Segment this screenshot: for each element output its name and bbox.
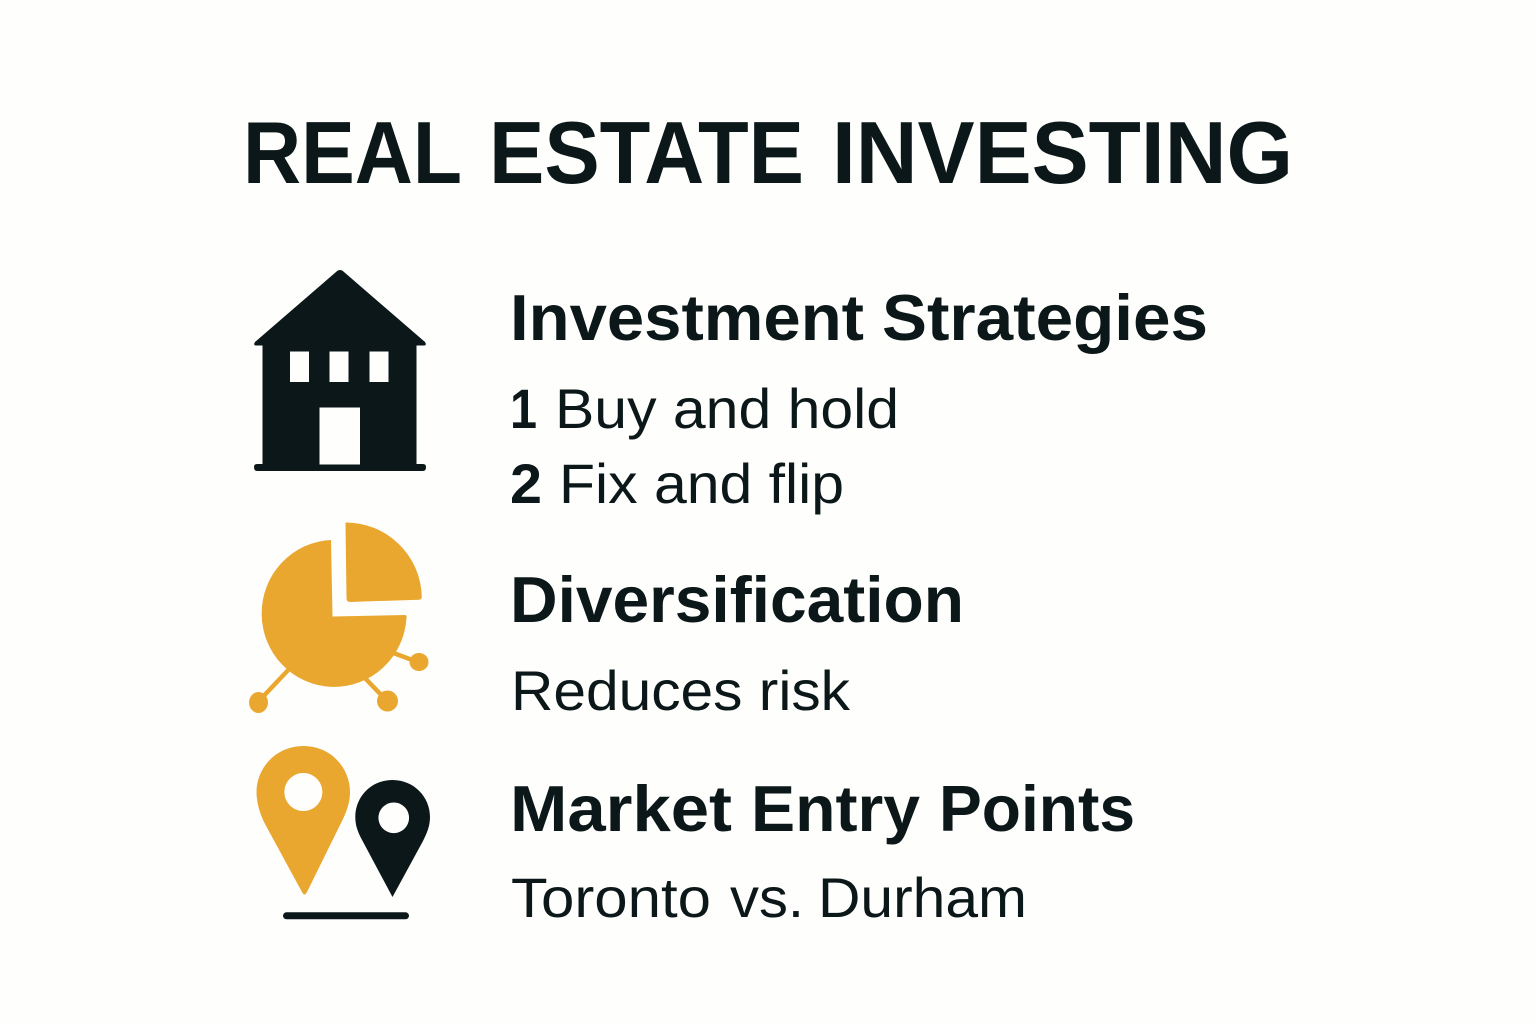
list item: fix and flip: 2: [510, 452, 542, 515]
heading: investment strategies: [510, 281, 1208, 354]
text: toronto vs. durham: Durham: [818, 866, 1027, 929]
list item: buy and hold: 1: [510, 377, 537, 440]
text: reduces risk: Reduces risk: [511, 659, 851, 722]
heading: market entry points: Points: [939, 772, 1135, 845]
icon: pie chart with nodes: [249, 522, 428, 713]
title: ESTATE: [489, 103, 804, 202]
title: REAL: [243, 103, 462, 202]
text: toronto vs. durham: vs.: [730, 866, 804, 929]
heading: market entry points: Entry: [751, 772, 920, 845]
icon: gold pin: [256, 746, 350, 894]
icon: house: [254, 270, 426, 471]
list item: buy and hold: Buy and hold: [555, 377, 899, 440]
icon: dark pin: [355, 780, 430, 897]
heading: investment strategies: Strategies: [882, 281, 1208, 354]
heading: market entry points: [510, 772, 1135, 845]
title: [243, 103, 1293, 202]
title: INVESTING: [832, 103, 1293, 202]
list item: fix and flip: Fix and flip: [559, 452, 844, 515]
heading: market entry points: Market: [510, 772, 732, 845]
ground line: [283, 912, 409, 919]
heading: investment strategies: Investment: [510, 281, 864, 354]
heading: diversification: Diversification: [510, 563, 964, 636]
icon: map pins: [256, 746, 430, 919]
text: toronto vs. durham: [511, 866, 1027, 929]
text: toronto vs. durham: Toronto: [511, 866, 711, 929]
